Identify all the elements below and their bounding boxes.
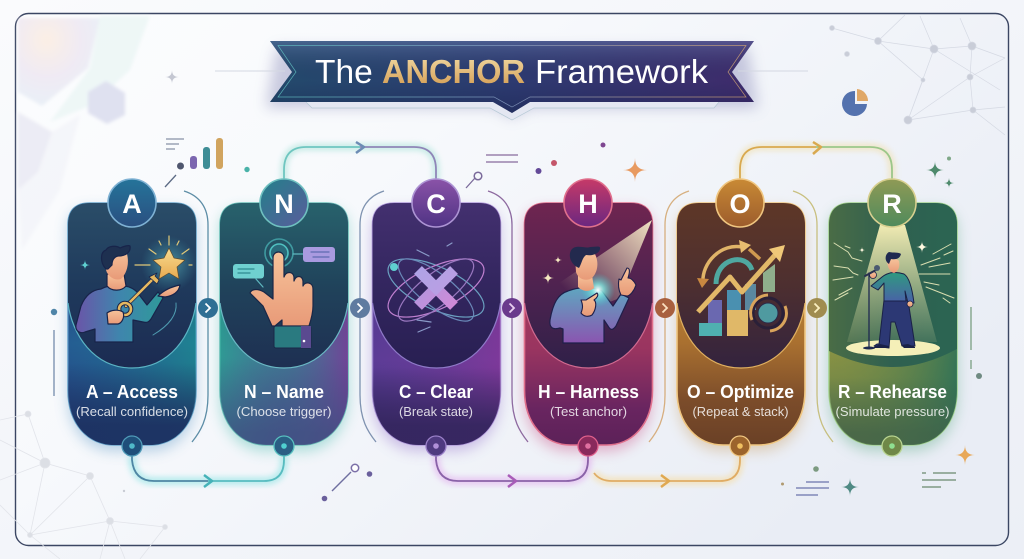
pie icon [842, 91, 867, 116]
ribbon [270, 41, 754, 113]
card A Access [68, 179, 197, 456]
sparkle orange [623, 158, 647, 182]
label O: (Repeat & stack) [692, 404, 788, 419]
label O: O – Optimize [687, 381, 794, 402]
loose decorations top [165, 70, 954, 188]
title banner [266, 41, 758, 120]
card glow [677, 209, 805, 451]
card glow [829, 209, 957, 451]
card R Rehearse [829, 179, 957, 456]
label N [236, 381, 332, 419]
letter badge A: A [122, 189, 142, 219]
letter badge H: H [578, 189, 598, 219]
decorative network top right [830, 15, 1005, 135]
ribbon trim [278, 46, 746, 107]
arrowhead [204, 475, 212, 487]
letter badge N [260, 179, 308, 227]
letter badge C [412, 179, 460, 227]
banner shadow [266, 48, 758, 118]
letter badge O: O [729, 189, 751, 219]
lines [486, 155, 518, 162]
bottom connector A to N [132, 456, 284, 487]
card glow [372, 209, 500, 451]
arrowhead [661, 475, 669, 487]
icon: person with light beam [540, 220, 652, 343]
label C: (Break state) [399, 404, 473, 419]
label R: R – Rehearse [838, 381, 947, 402]
card O Optimize [677, 179, 805, 456]
arrowhead [813, 142, 821, 154]
decorative hexagons top left [18, 16, 150, 250]
icon: tapping hand with bubbles [233, 239, 335, 348]
label N: N – Name [244, 381, 324, 402]
icon: person with key and star [76, 236, 197, 342]
sparkles green [926, 161, 944, 179]
bottom connector C to H [436, 456, 588, 487]
arrowhead [356, 142, 364, 153]
label R: (Simulate pressure) [836, 404, 950, 419]
card body [68, 203, 196, 445]
card glow [220, 209, 348, 451]
card C Clear [372, 179, 500, 456]
card body [220, 203, 348, 445]
list lines [166, 139, 184, 149]
card body [677, 203, 805, 445]
bottom node O [730, 436, 750, 456]
bottom node R [882, 436, 902, 456]
letter badge R: R [882, 189, 902, 219]
title side rules [215, 70, 808, 72]
decorative network bottom left [0, 411, 168, 559]
bottom node N [274, 436, 294, 456]
label H [538, 381, 639, 419]
card glow [68, 209, 196, 451]
letter badge N: N [274, 189, 294, 219]
card H Harness [524, 179, 652, 456]
label A: A – Access [86, 381, 178, 402]
bottom node H [578, 436, 598, 456]
pin [466, 178, 475, 188]
card body [829, 203, 957, 445]
loose decorations bottom [51, 307, 982, 501]
mini bar chart [190, 156, 197, 169]
label C: C – Clear [399, 381, 473, 402]
title banner: Framework [535, 54, 708, 91]
label H: H – Harness [538, 381, 639, 402]
card glow [524, 209, 652, 451]
top connector N to C [284, 142, 436, 182]
label O [687, 381, 794, 419]
label A [76, 381, 188, 419]
letter badge A [108, 179, 156, 227]
top connector O to R [740, 142, 892, 182]
arrowhead [508, 475, 516, 487]
letter badge R [868, 179, 916, 227]
dots [600, 142, 606, 148]
label C [399, 381, 473, 419]
sparkle grey [165, 70, 179, 84]
card body [372, 203, 500, 445]
chevron connectors between cards [198, 298, 827, 318]
banner under-trim [306, 102, 719, 120]
title text: The [315, 54, 373, 91]
bottom connector H to O [594, 456, 740, 487]
bottom node C [426, 436, 446, 456]
card body [524, 203, 652, 445]
label H: (Test anchor) [550, 404, 627, 419]
side bracket arcs [184, 191, 833, 442]
icon: speaker in spotlight [833, 225, 954, 356]
card N Name [220, 179, 348, 456]
letter badge O [716, 179, 764, 227]
label R [836, 381, 950, 419]
bottom node A [122, 436, 142, 456]
label N: (Choose trigger) [236, 404, 332, 419]
label A: (Recall confidence) [76, 404, 188, 419]
title banner: ANCHOR [382, 54, 525, 91]
letter badge H [564, 179, 612, 227]
icon: crossed out orbits [380, 243, 492, 332]
letter badge C: C [426, 189, 446, 219]
icon: growth chart with cycle arrows [697, 240, 786, 336]
